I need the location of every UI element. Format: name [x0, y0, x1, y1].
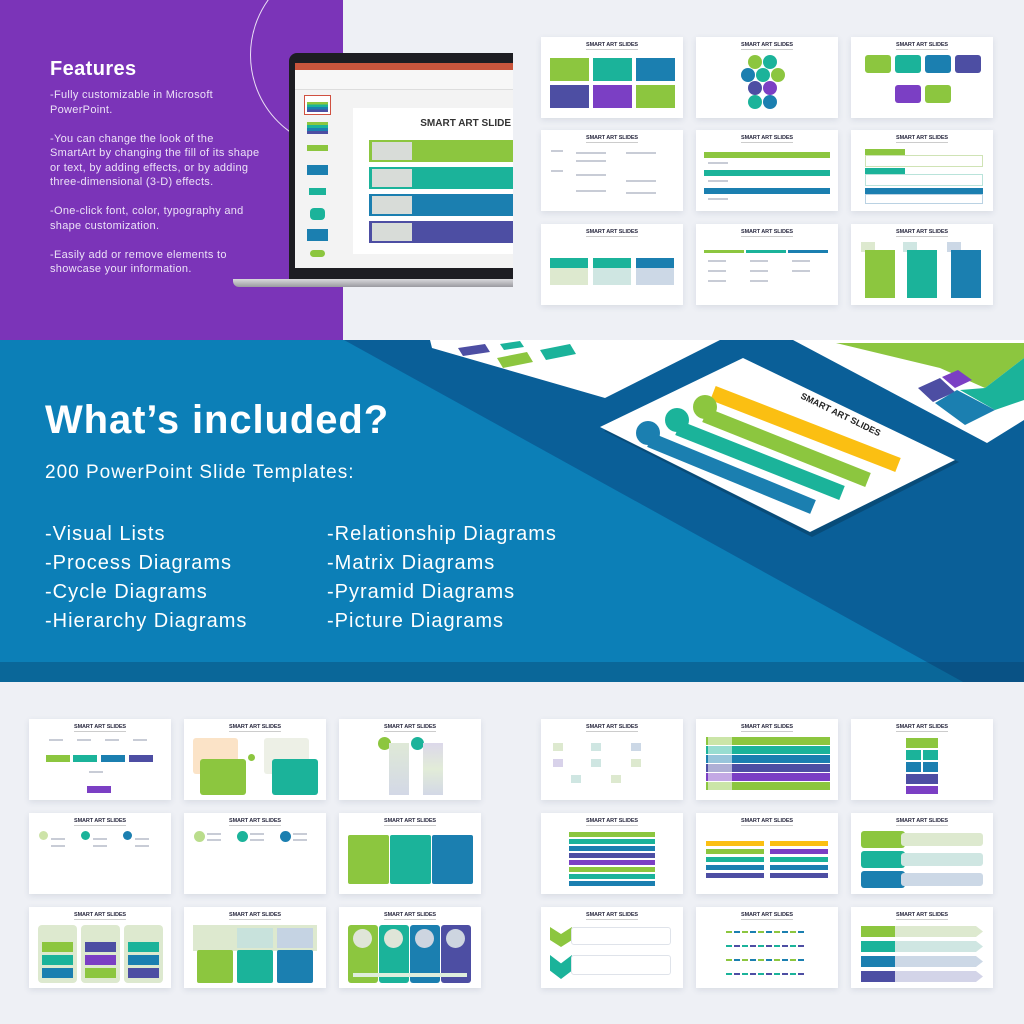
subheading: 200 templates: 200 PowerPoint Slide Templates:	[45, 462, 354, 483]
text block: features list	[50, 89, 259, 275]
bl thumb 8	[184, 907, 326, 988]
list: diagram types column 2	[327, 523, 557, 632]
main slide	[353, 108, 513, 254]
bl thumb 2: SMART ART SLIDES	[229, 724, 281, 730]
thumb 3	[851, 37, 993, 118]
panel: features (purple)	[0, 0, 343, 340]
panel: what's included (blue)	[0, 340, 1024, 682]
bl thumb 7	[29, 907, 171, 988]
bl thumb 6	[339, 813, 481, 894]
bl thumb 3	[339, 719, 481, 800]
br thumb 6	[851, 813, 993, 894]
isometric slide: main smart art slides: SMART ART SLIDES	[799, 391, 882, 438]
laptop base	[233, 279, 513, 287]
br thumb 1: SMART ART SLIDES	[586, 724, 638, 730]
thumb 6: SMART ART SLIDES	[896, 135, 948, 141]
bl thumb 5: SMART ART SLIDES	[229, 818, 281, 824]
thumb 6	[851, 130, 993, 211]
isometric slide: top left partial	[430, 340, 720, 398]
bl thumb 6: SMART ART SLIDES	[384, 818, 436, 824]
list: diagram types column 2: -Pyramid Diagrams	[327, 581, 515, 603]
laptop	[233, 53, 513, 287]
br thumb 9	[851, 907, 993, 988]
bl thumb 2	[184, 719, 326, 800]
thumb 4	[541, 130, 683, 211]
slide panel thumbnails	[304, 95, 331, 257]
text block: features list: three-dimensional (3-D) effects.	[50, 176, 213, 188]
thumb 2	[696, 37, 838, 118]
bl thumb 8: SMART ART SLIDES	[229, 912, 281, 918]
grid: top right thumbnails	[540, 37, 994, 308]
thumb 9: SMART ART SLIDES	[896, 229, 948, 235]
list: diagram types column 2: -Relationship Diagrams	[327, 523, 557, 545]
text block: features list: showcase your information.	[50, 263, 192, 275]
br thumb 1	[541, 719, 683, 800]
text block: features list: -Fully customizable in Microsoft	[50, 89, 213, 101]
br thumb 8	[696, 907, 838, 988]
panel: top right background	[343, 0, 1024, 340]
thumb 1	[541, 37, 683, 118]
isometric slide: top right	[793, 340, 1024, 443]
bl thumb 9: SMART ART SLIDES	[384, 912, 436, 918]
text block: features list: -You can change the look of the	[50, 132, 214, 144]
br thumb 3: SMART ART SLIDES	[896, 724, 948, 730]
thumb 1: SMART ART SLIDES	[586, 42, 638, 48]
br thumb 7	[541, 907, 683, 988]
br thumb 9: SMART ART SLIDES	[896, 912, 948, 918]
bl thumb 3: SMART ART SLIDES	[384, 724, 436, 730]
text block: features list: or text, by adding effects, or by adding	[50, 162, 248, 174]
list: diagram types column 1: -Hierarchy Diagrams	[45, 610, 247, 632]
br thumb 2: SMART ART SLIDES	[741, 724, 793, 730]
text block: features list: SmartArt by changing the fill of its shape	[50, 147, 259, 159]
text block: features list: -One-click font, color, typography and	[50, 205, 244, 217]
br thumb 8: SMART ART SLIDES	[741, 912, 793, 918]
thumb 2: SMART ART SLIDES	[741, 42, 793, 48]
bl thumb 1: SMART ART SLIDES	[74, 724, 126, 730]
bl thumb 4: SMART ART SLIDES	[74, 818, 126, 824]
heading: what's included: What’s included?	[45, 398, 389, 442]
thumb 8	[696, 224, 838, 305]
thumb 5	[696, 130, 838, 211]
list: diagram types column 2: -Matrix Diagrams	[327, 552, 495, 574]
list: diagram types column 1: -Visual Lists	[45, 523, 165, 545]
text block: features list: PowerPoint.	[50, 104, 113, 116]
isometric slide: main smart art slides	[600, 358, 959, 537]
br thumb 7: SMART ART SLIDES	[586, 912, 638, 918]
br thumb 6: SMART ART SLIDES	[896, 818, 948, 824]
heading: Features: Features	[50, 58, 137, 80]
text block: features list: shape customization.	[50, 220, 159, 232]
thumb 4: SMART ART SLIDES	[586, 135, 638, 141]
laptop screen	[289, 53, 513, 279]
thumb 7	[541, 224, 683, 305]
bl thumb 9	[339, 907, 481, 988]
list: diagram types column 1	[45, 523, 247, 632]
br thumb 5: SMART ART SLIDES	[741, 818, 793, 824]
bl thumb 5	[184, 813, 326, 894]
br thumb 3	[851, 719, 993, 800]
br thumb 4: SMART ART SLIDES	[586, 818, 638, 824]
list: diagram types column 2: -Picture Diagrams	[327, 610, 504, 632]
main slide: SMART ART SLIDE	[420, 118, 511, 129]
thumb 8: SMART ART SLIDES	[741, 229, 793, 235]
thumb 3: SMART ART SLIDES	[896, 42, 948, 48]
decorative arc	[250, 0, 440, 150]
br thumb 5	[696, 813, 838, 894]
thumb 7: SMART ART SLIDES	[586, 229, 638, 235]
br thumb 2	[696, 719, 838, 800]
panel: bottom right thumbnails	[540, 719, 994, 991]
panel: bottom left thumbnails	[0, 682, 511, 1024]
text block: features list: -Easily add or remove elements to	[50, 248, 227, 260]
bl thumb 7: SMART ART SLIDES	[74, 912, 126, 918]
thumb 5: SMART ART SLIDES	[741, 135, 793, 141]
bl thumb 1	[29, 719, 171, 800]
list: diagram types column 1: -Process Diagrams	[45, 552, 232, 574]
list: diagram types column 1: -Cycle Diagrams	[45, 581, 208, 603]
bl thumb 4	[29, 813, 171, 894]
br thumb 4	[541, 813, 683, 894]
thumb 9	[851, 224, 993, 305]
